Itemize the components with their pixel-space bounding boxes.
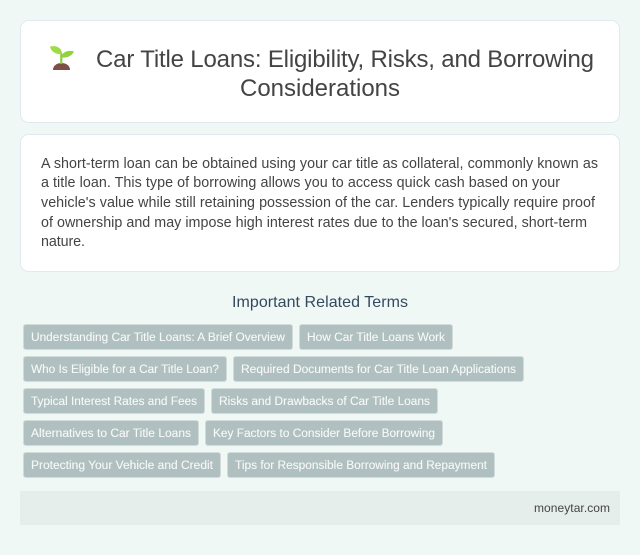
title: Considerations	[240, 75, 400, 102]
tag list	[24, 324, 524, 478]
footer: moneytar.com	[534, 501, 610, 515]
tag	[24, 356, 226, 382]
tag: Key Factors to Consider Before Borrowing	[213, 426, 435, 440]
tag	[234, 356, 524, 382]
tag	[24, 420, 198, 446]
tag	[24, 452, 220, 478]
tag: Protecting Your Vehicle and Credit	[31, 458, 214, 472]
tag	[228, 452, 494, 478]
tag: Risks and Drawbacks of Car Title Loans	[219, 394, 430, 408]
description text: of ownership and may impose high interest rates due to the loan's secured, short-term	[41, 215, 587, 231]
tag: Alternatives to Car Title Loans	[31, 426, 191, 440]
footer	[20, 491, 620, 525]
tag: Who Is Eligible for a Car Title Loan?	[31, 362, 219, 376]
tag: Required Documents for Car Title Loan Applications	[241, 362, 516, 376]
description text: nature.	[41, 234, 85, 250]
icon: seedling	[50, 46, 74, 70]
tag	[300, 324, 452, 350]
tag	[212, 388, 438, 414]
tag: Typical Interest Rates and Fees	[31, 394, 197, 408]
tag	[24, 324, 292, 350]
description text	[41, 156, 598, 250]
description text: A short-term loan can be obtained using your car title as collateral, commonly known as	[41, 156, 598, 172]
section heading: Important Related Terms	[232, 294, 408, 311]
title: Car Title Loans: Eligibility, Risks, and Borrowing	[96, 46, 594, 73]
tag: Tips for Responsible Borrowing and Repayment	[235, 458, 488, 472]
header panel	[20, 20, 620, 122]
description text: a title loan. This type of borrowing allows you to access quick cash based on your	[41, 175, 560, 191]
description panel	[20, 134, 620, 272]
tag	[24, 388, 204, 414]
description text: vehicle's value while still retaining possession of the car. Lenders typically require proof	[41, 195, 595, 211]
tag: Understanding Car Title Loans: A Brief Overview	[31, 330, 285, 344]
tag: How Car Title Loans Work	[307, 330, 446, 344]
tag	[206, 420, 442, 446]
title	[96, 46, 594, 102]
